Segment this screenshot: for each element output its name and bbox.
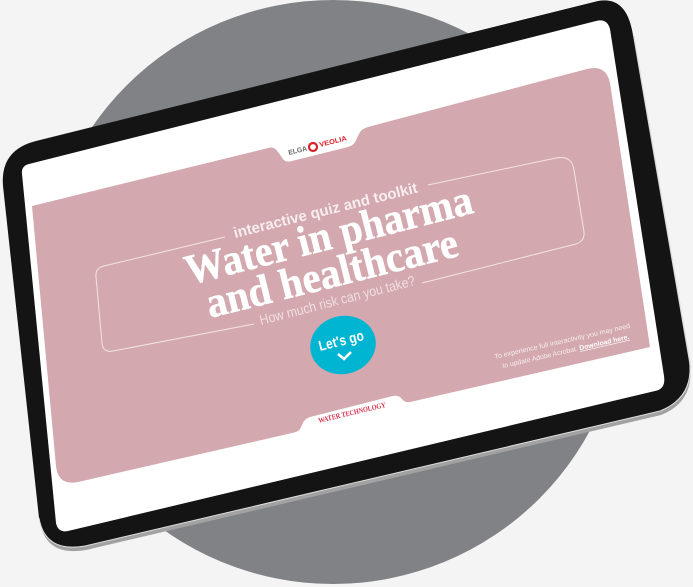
- title line 2: and healthcare: [201, 220, 463, 328]
- main title: [180, 177, 477, 328]
- button label: Let's go: [317, 328, 366, 355]
- note line 2: to update Adobe Acrobat. Download here.: [502, 334, 630, 370]
- logo emblem: [309, 143, 317, 151]
- acrobat note: [494, 323, 631, 370]
- pink panel: [32, 68, 650, 483]
- logo: [288, 135, 348, 157]
- title outline: [96, 158, 584, 351]
- icon: chevron down: [338, 352, 351, 359]
- ELGA wordmark: ELGA: [288, 146, 308, 157]
- let's go button: [304, 309, 382, 381]
- water technology label: WATER TECHNOLOGY: [317, 400, 387, 425]
- title line 1: Water in pharma: [180, 177, 477, 295]
- VEOLIA wordmark: VEOLIA: [319, 135, 348, 149]
- tagline: How much risk can you take?: [258, 272, 417, 328]
- button circle: [304, 309, 382, 381]
- note line 1: To experience full interactivity you may need: [494, 323, 631, 361]
- subtitle: interactive quiz and toolkit: [232, 180, 419, 242]
